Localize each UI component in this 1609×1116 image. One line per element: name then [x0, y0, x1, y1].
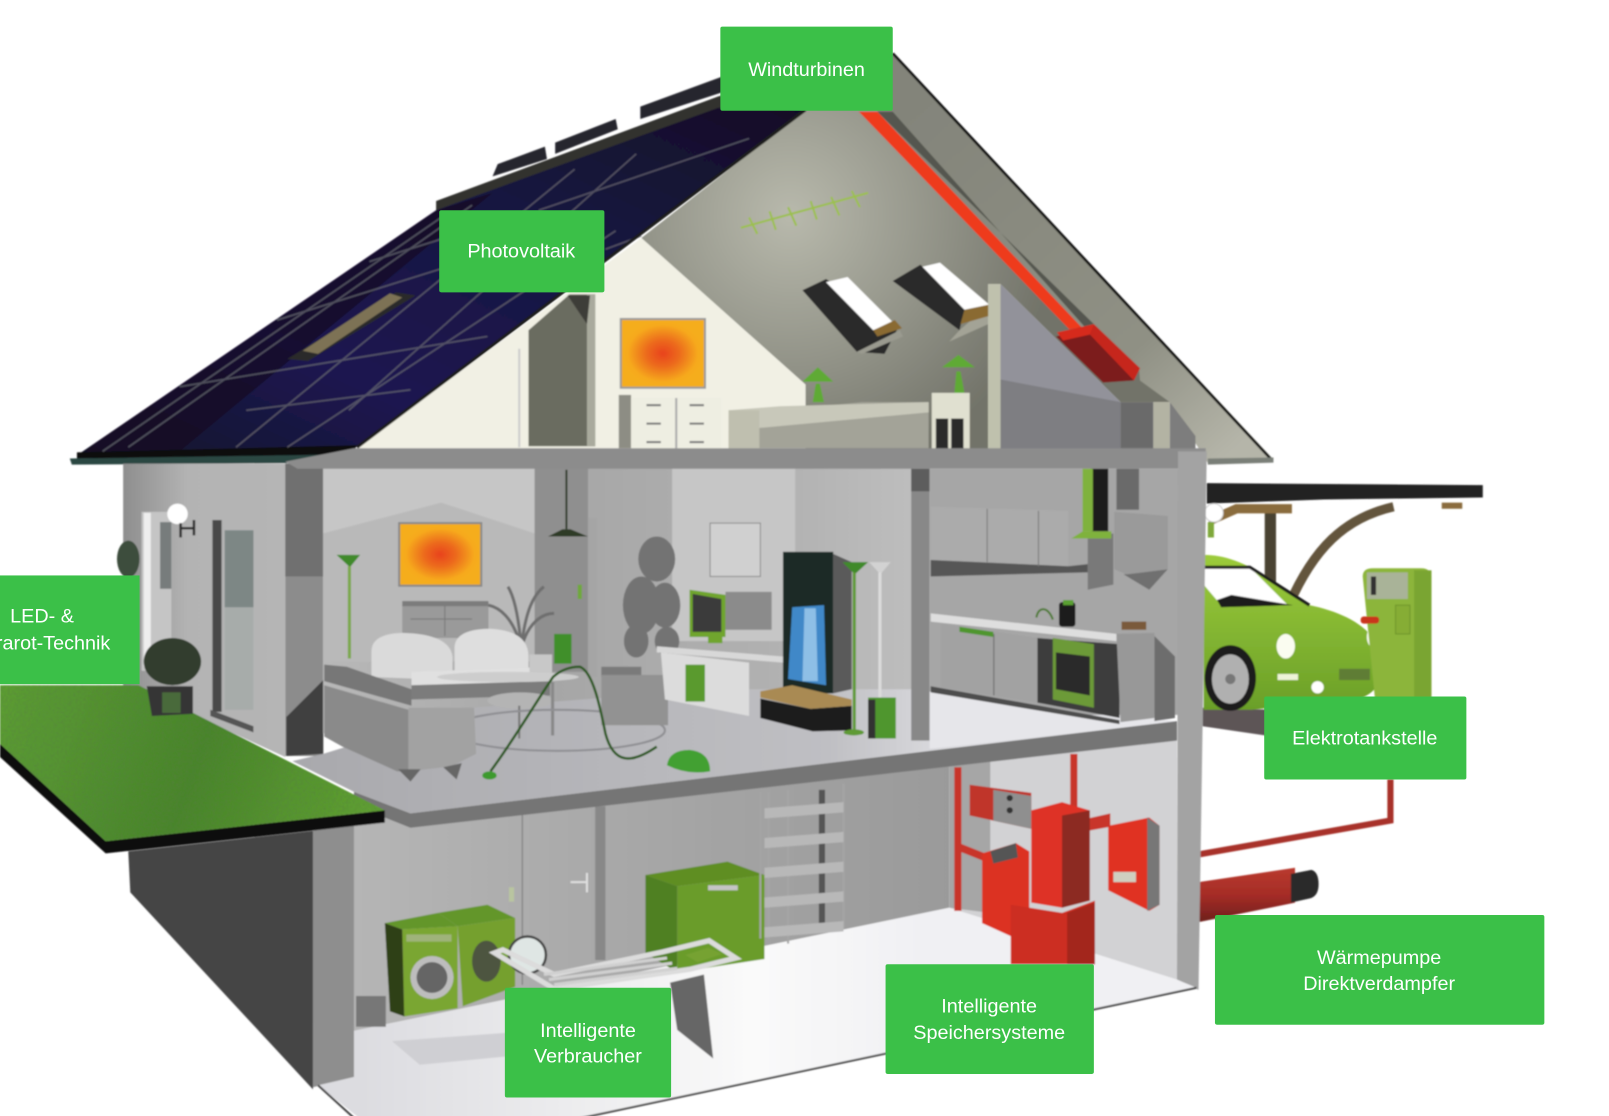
dryer — [438, 905, 546, 1006]
plant behind — [117, 541, 140, 577]
freezer — [645, 862, 764, 972]
car — [1204, 555, 1382, 711]
monitors — [690, 590, 772, 643]
heat panel living room — [398, 522, 482, 587]
heat panel attic — [620, 318, 706, 389]
basement right wall — [949, 741, 1177, 980]
kitchen floor — [930, 691, 1177, 749]
armchair 2 — [601, 667, 668, 725]
potted plant — [144, 638, 201, 716]
panel: kitchen — [930, 451, 1207, 990]
ceiling slab — [285, 448, 1206, 469]
wall pillar — [285, 464, 323, 756]
label: Photovoltaik: Photovoltaik — [467, 240, 575, 262]
panel: living room — [285, 448, 1206, 813]
basement floor — [318, 908, 1196, 1116]
electrical panel — [970, 785, 1031, 829]
label: Intelligente Speichersysteme — [886, 964, 1094, 1074]
left wall light — [323, 467, 535, 662]
label: Elektrotankstelle — [1264, 696, 1466, 780]
red duct — [859, 112, 1082, 329]
faucet — [1036, 609, 1053, 620]
lawn surface — [0, 685, 385, 841]
nightstand — [932, 393, 970, 449]
ground slab — [1203, 708, 1272, 736]
blinds wall — [672, 467, 795, 641]
panel: lawn — [0, 638, 385, 853]
shelf cavity — [1037, 638, 1120, 718]
ceiling — [641, 53, 1273, 463]
red wall unit — [1108, 818, 1160, 911]
roof window — [287, 292, 416, 361]
roof slab cut — [877, 53, 1273, 463]
skylight 1 — [802, 277, 903, 354]
kitchen wall — [930, 469, 1182, 715]
speaker — [868, 698, 896, 739]
duct shadow — [877, 112, 1113, 359]
window — [142, 512, 171, 671]
label: LED- & Infrarot-Technik: LED- & — [10, 606, 74, 628]
base kick plate — [931, 686, 1120, 724]
roof inner edge — [357, 110, 806, 447]
label: Wärmepumpe Direktverdampfer: Wärmepumpe — [1317, 947, 1441, 969]
label: Windturbinen — [720, 27, 893, 111]
cabinet — [402, 601, 488, 638]
side wall — [123, 464, 285, 757]
basement back wall — [354, 764, 949, 1031]
roof edge outline — [893, 53, 1270, 459]
lamp 1 — [802, 367, 833, 402]
boiler — [982, 843, 1029, 939]
heat pump cylinder — [1199, 868, 1295, 922]
floor lamps — [842, 562, 891, 735]
middle wall section — [535, 467, 588, 672]
green bin — [554, 634, 572, 664]
switch — [509, 887, 514, 902]
door — [578, 518, 597, 677]
outer wall right — [1177, 451, 1207, 990]
sofa — [371, 629, 552, 700]
label: Intelligente Verbraucher: Verbraucher — [534, 1046, 642, 1068]
label: Windturbinen: Windturbinen — [748, 59, 865, 81]
floor edge lines — [318, 988, 1196, 1116]
pendant lamp — [548, 470, 588, 536]
back wall — [323, 467, 913, 733]
label: Wärmepumpe Direktverdampfer: Direktverdampfer — [1303, 973, 1455, 995]
palm — [488, 587, 554, 648]
waterfall display — [783, 552, 852, 693]
red storage tower — [1031, 802, 1090, 908]
rubber plant — [623, 536, 680, 657]
oven — [1053, 638, 1094, 708]
label: Intelligente Verbraucher: Intelligente — [540, 1020, 636, 1042]
red pipes — [954, 754, 1110, 911]
carport lamp — [1205, 504, 1223, 537]
label: Photovoltaik — [439, 210, 604, 292]
lawn edge — [0, 744, 385, 853]
shelf rack — [760, 784, 843, 944]
shelf end — [1116, 633, 1154, 722]
heat pipe — [1199, 780, 1390, 854]
carport roof — [1207, 483, 1483, 504]
kettle — [1059, 600, 1075, 627]
label: Intelligente Speichersysteme: Intelligente — [941, 995, 1037, 1017]
counter — [931, 613, 1116, 641]
skylight 2 — [893, 263, 989, 342]
rack shadow — [392, 1033, 506, 1065]
ceiling light — [741, 191, 868, 234]
wall poster frame — [710, 523, 760, 576]
extractor hood — [1071, 469, 1111, 539]
black cabinet — [760, 685, 852, 731]
wall cabinet — [1114, 512, 1168, 574]
label: Intelligente Verbraucher — [505, 988, 671, 1098]
pillar — [313, 825, 354, 1087]
wardrobe — [619, 395, 721, 448]
armchair — [324, 665, 476, 782]
desk — [657, 646, 783, 716]
cylinder end cap — [1291, 870, 1319, 903]
upper cabinets — [931, 507, 1068, 566]
jars — [1122, 622, 1146, 630]
label: Elektrotankstelle: Elektrotankstelle — [1292, 728, 1437, 750]
lower cabinets — [941, 624, 1037, 703]
red storage base — [1011, 901, 1095, 964]
wall lamp — [167, 504, 195, 537]
wall shadows — [1116, 469, 1139, 510]
floor surface — [292, 689, 1177, 813]
door line — [521, 810, 523, 985]
photovoltaic roof surface — [77, 108, 806, 455]
floor slab — [354, 721, 1177, 828]
room divider wall — [911, 469, 930, 741]
panel: solar roof — [70, 72, 811, 465]
attic partition wall — [988, 284, 1195, 450]
patio door — [210, 520, 253, 732]
floor lamp — [337, 555, 360, 659]
panel: exterior side wall — [117, 464, 323, 757]
door handle — [571, 873, 588, 892]
label: Wärmepumpe Direktverdampfer — [1215, 915, 1544, 1025]
bottom roof edge — [70, 452, 354, 465]
panel: basement — [128, 741, 1196, 1116]
lamp 2 — [942, 355, 975, 394]
drying rack — [495, 941, 736, 1059]
basement outer dark wall — [128, 831, 313, 1089]
gable wall — [357, 238, 806, 448]
label: LED- & Infrarot-Technik — [0, 575, 140, 684]
vacuum cleaner — [482, 667, 710, 780]
solar thermal collectors on ridge — [493, 77, 729, 176]
rug — [449, 710, 665, 751]
laundry box — [356, 996, 386, 1027]
door frame — [595, 806, 605, 960]
carport supports — [1209, 506, 1462, 605]
panel: attic — [357, 53, 1273, 465]
panel: heat pump outside — [1199, 780, 1390, 922]
ridge rail — [436, 72, 811, 211]
side tables — [437, 672, 579, 739]
charging station — [1361, 568, 1431, 700]
panel grid lines — [103, 138, 749, 451]
label: Intelligente Speichersysteme: Speichersysteme — [913, 1022, 1065, 1044]
chimney — [518, 294, 595, 447]
bed — [729, 402, 929, 448]
panel: carport with electric car — [1203, 483, 1483, 736]
ventilation box — [1056, 324, 1140, 383]
washing machine — [385, 913, 458, 1017]
dark left roof band — [77, 193, 493, 455]
